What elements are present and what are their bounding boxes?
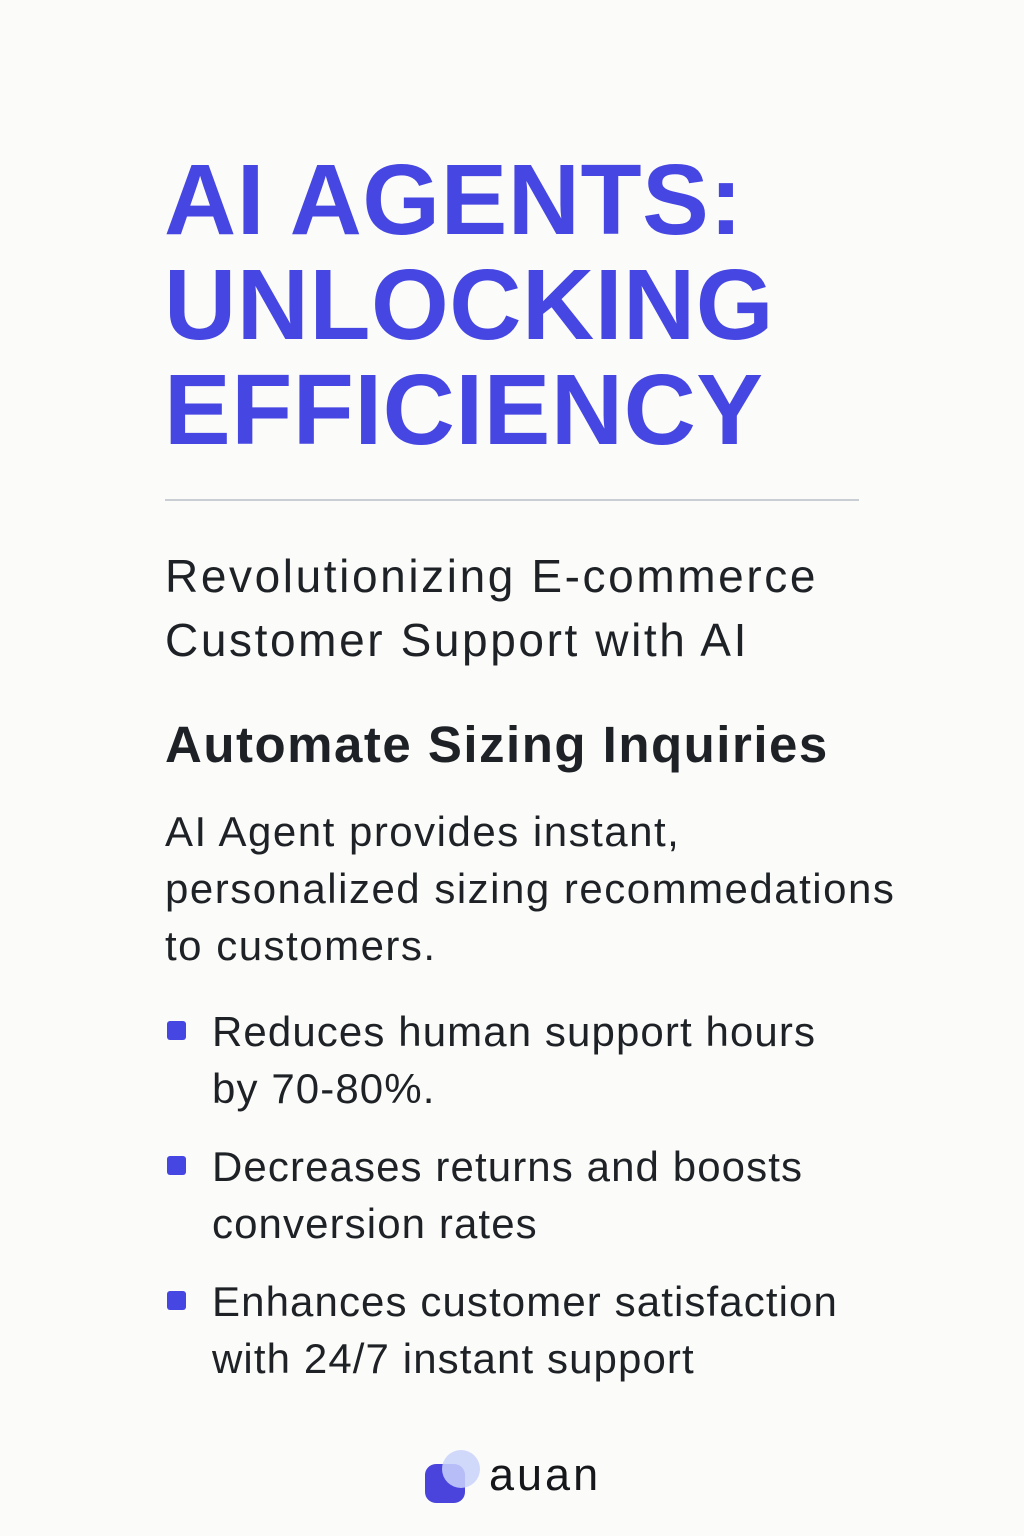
bullet 2: conversion rates [212, 1200, 538, 1247]
bullet 1 [167, 1008, 816, 1112]
bullet icon [167, 1156, 186, 1175]
bullet 3: Enhances customer satisfaction [212, 1278, 838, 1325]
heading: automate sizing inquiries: Automate Sizing Inquiries [165, 716, 829, 773]
description text: to customers. [165, 922, 437, 969]
subtitle [165, 550, 818, 666]
bullet 1: Reduces human support hours [212, 1008, 816, 1055]
title: UNLOCKING [164, 249, 774, 361]
description text: personalized sizing recommedations [165, 865, 895, 912]
subtitle: Customer Support with AI [165, 614, 749, 666]
title: EFFICIENCY [164, 354, 763, 466]
bullet icon [167, 1021, 186, 1040]
description text: AI Agent provides instant, [165, 808, 680, 855]
title: AI AGENTS: [164, 144, 743, 256]
logo mark [425, 1450, 480, 1503]
bullet 3: with 24/7 instant support [212, 1335, 695, 1382]
bullet 2 [167, 1143, 803, 1247]
logo [425, 1449, 601, 1503]
bullet 2: Decreases returns and boosts [212, 1143, 803, 1190]
bullet 3 [167, 1278, 838, 1382]
bullet icon [167, 1291, 186, 1310]
title [164, 144, 774, 466]
description text [165, 808, 895, 969]
subtitle: Revolutionizing E-commerce [165, 550, 818, 602]
logo text: auan [489, 1449, 601, 1500]
bullet 1: by 70-80%. [212, 1065, 435, 1112]
